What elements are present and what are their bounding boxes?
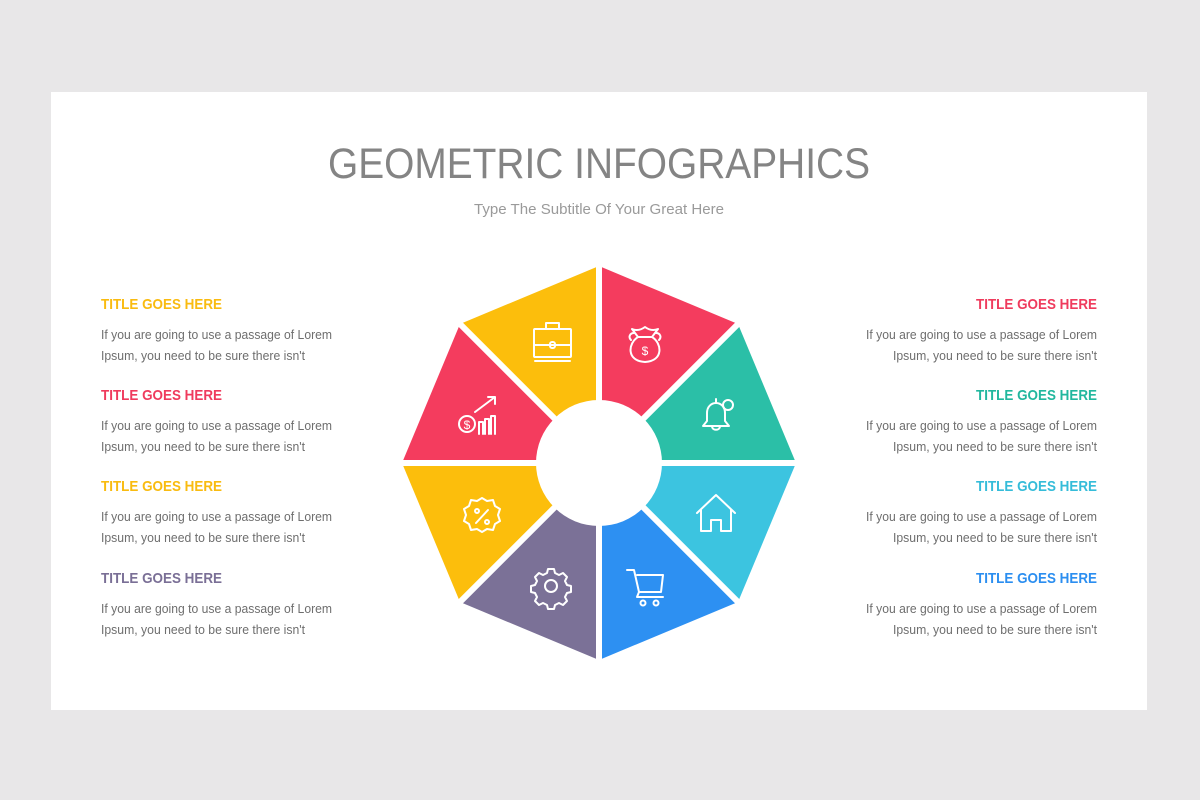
segment: bottom-right blue: [599, 463, 738, 660]
text block: left 2: If you are going to use a passage of Lorem: [101, 419, 332, 433]
icon: growth chart: [459, 397, 495, 434]
icons: [459, 323, 735, 609]
text block: right 2: If you are going to use a passage of Lorem: [866, 419, 1097, 433]
icon: gear: [531, 569, 571, 609]
text block: right 3: TITLE GOES HERE: [976, 478, 1097, 495]
icon: money bag: $: [642, 344, 649, 358]
right text blocks: [866, 296, 1098, 637]
text block: right 3: If you are going to use a passage of Lorem: [866, 510, 1097, 524]
center circle: [536, 400, 662, 526]
text block: left 4: Ipsum, you need to be sure there isn't: [101, 623, 306, 637]
text block: right 1: If you are going to use a passage of Lorem: [866, 328, 1097, 342]
subtitle: Type The Subtitle Of Your Great Here: [474, 201, 724, 218]
segment: top-left yellow: [460, 266, 599, 463]
text block: right 3: [866, 478, 1098, 545]
text block: right 1: TITLE GOES HERE: [976, 296, 1097, 313]
title: GEOMETRIC INFOGRAPHICS: [328, 140, 870, 188]
text block: right 1: [866, 296, 1098, 363]
icon: money bag: [630, 327, 660, 362]
segment: top-right red: [599, 266, 738, 463]
text block: left 2: [101, 387, 332, 454]
text block: right 4: [866, 570, 1098, 637]
segment: bottom-left purple: [460, 463, 599, 660]
text block: left 4: [101, 570, 332, 637]
icon: percent badge: [464, 498, 500, 532]
text block: left 3: [101, 478, 332, 545]
text block: right 1: Ipsum, you need to be sure there isn't: [893, 349, 1098, 363]
text block: left 2: Ipsum, you need to be sure there isn't: [101, 440, 306, 454]
text block: right 4: TITLE GOES HERE: [976, 570, 1097, 587]
text block: left 1: [101, 296, 332, 363]
text block: right 2: [866, 387, 1098, 454]
text block: left 1: TITLE GOES HERE: [101, 296, 222, 313]
text block: left 1: Ipsum, you need to be sure there isn't: [101, 349, 306, 363]
segment: right-upper teal: [599, 324, 796, 463]
text block: right 3: Ipsum, you need to be sure there isn't: [893, 531, 1098, 545]
octagon chart: [396, 260, 802, 666]
segment: left-upper red: [402, 324, 599, 463]
card panel: [51, 92, 1147, 710]
icon: growth chart: $: [464, 418, 471, 432]
text block: right 4: Ipsum, you need to be sure there isn't: [893, 623, 1098, 637]
icon: briefcase: [534, 323, 571, 361]
text block: left 3: TITLE GOES HERE: [101, 478, 222, 495]
text block: left 2: TITLE GOES HERE: [101, 387, 222, 404]
segment: left-lower yellow: [402, 463, 599, 602]
icon: bell: [703, 399, 733, 430]
text block: left 4: TITLE GOES HERE: [101, 570, 222, 587]
segment: right-lower cyan: [599, 463, 796, 602]
icon: house: [697, 495, 735, 531]
text block: left 1: If you are going to use a passage of Lorem: [101, 328, 332, 342]
text block: right 4: If you are going to use a passage of Lorem: [866, 602, 1097, 616]
icon: cart: [627, 570, 663, 606]
text block: left 4: If you are going to use a passage of Lorem: [101, 602, 332, 616]
text block: right 2: Ipsum, you need to be sure there isn't: [893, 440, 1098, 454]
text block: left 3: Ipsum, you need to be sure there isn't: [101, 531, 306, 545]
text block: right 2: TITLE GOES HERE: [976, 387, 1097, 404]
text block: left 3: If you are going to use a passage of Lorem: [101, 510, 332, 524]
left text blocks: [101, 296, 332, 637]
